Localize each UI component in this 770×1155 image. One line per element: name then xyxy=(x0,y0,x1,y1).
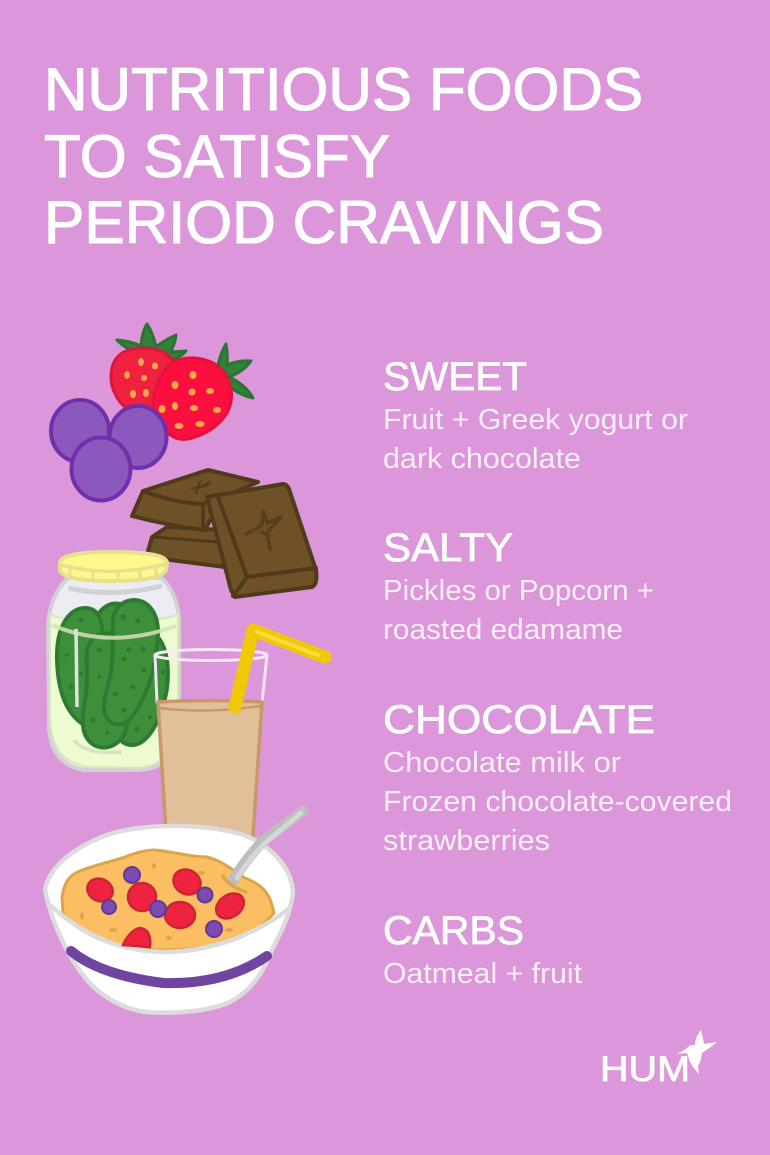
fruit xyxy=(84,865,249,947)
icon: strawberries xyxy=(111,324,253,439)
title: TO SATISFY xyxy=(44,123,390,190)
pickles xyxy=(57,600,168,748)
text block: sweet: Fruit + Greek yogurt or xyxy=(383,404,688,436)
icon: oatmeal bowl xyxy=(45,811,303,1013)
logo: HUM hummingbird xyxy=(600,1030,717,1089)
spoon xyxy=(233,811,303,880)
band xyxy=(71,951,267,983)
text block: salty: Pickles or Popcorn + xyxy=(383,575,654,607)
text block: chocolate xyxy=(383,698,732,857)
text block: chocolate: Chocolate milk or xyxy=(383,747,621,779)
straw xyxy=(235,630,325,707)
text block: carbs: Oatmeal + fruit xyxy=(383,958,582,990)
text block: chocolate: Frozen chocolate-covered xyxy=(383,786,732,818)
text block: salty: roasted edamame xyxy=(383,614,623,646)
icon: blueberries xyxy=(51,400,166,500)
text block: carbs: CARBS xyxy=(383,909,524,953)
title: PERIOD CRAVINGS xyxy=(44,189,604,256)
text block: sweet xyxy=(383,355,688,475)
icon: chocolate bars xyxy=(132,470,316,597)
text block: sweet: SWEET xyxy=(383,355,527,399)
text block: chocolate: CHOCOLATE xyxy=(383,698,655,742)
text block: sweet: dark chocolate xyxy=(383,443,581,475)
title: NUTRITIOUS FOODS xyxy=(44,56,643,123)
icon: chocolate milk glass with straw xyxy=(155,630,325,850)
text block: salty: SALTY xyxy=(383,526,513,570)
text block: chocolate: strawberries xyxy=(383,825,550,857)
lid xyxy=(60,552,167,582)
text block: salty xyxy=(383,526,654,646)
title xyxy=(44,56,643,256)
logo: HUM hummingbird: HUM xyxy=(600,1050,690,1089)
icon: pickle jar xyxy=(48,552,179,770)
text block: carbs xyxy=(383,909,582,990)
